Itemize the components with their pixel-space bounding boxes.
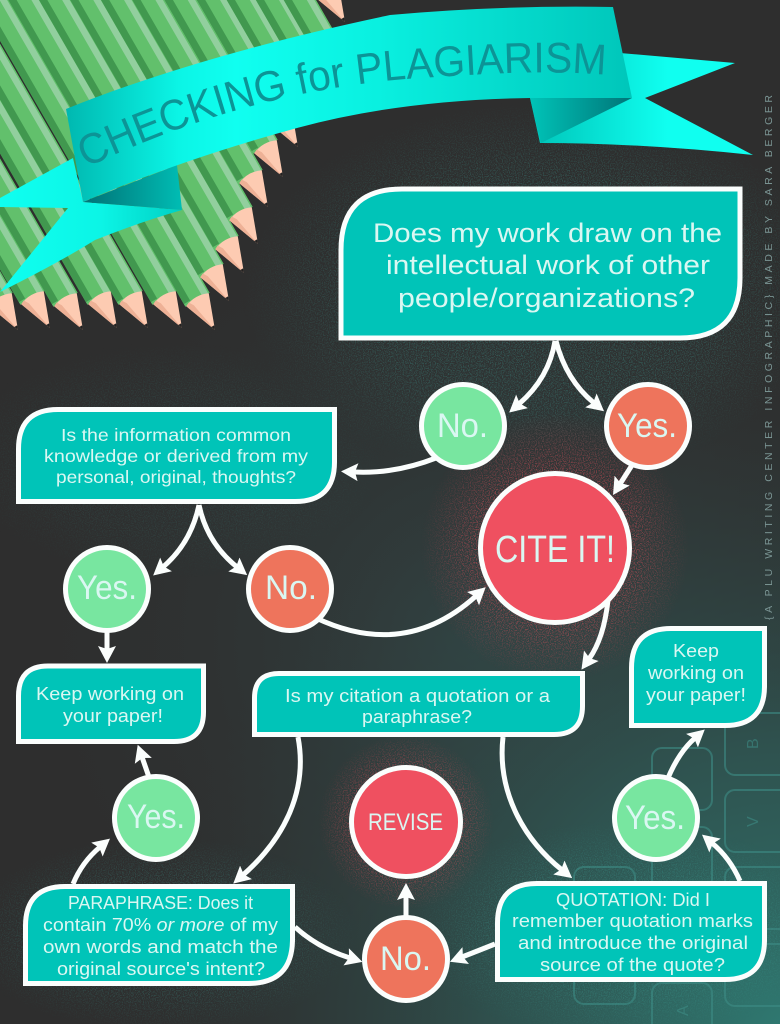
arrow: no to common knowledge box [354, 458, 436, 472]
arrow: right yes to keep working [668, 738, 695, 778]
arrow: box to left no [199, 505, 237, 567]
circle: top yes [606, 384, 690, 468]
circle: left no [248, 548, 332, 630]
arrow: quotation to right yes [712, 843, 740, 881]
right keep working box: working on [647, 663, 744, 683]
arrow: left yes to keep working [104, 628, 110, 650]
right keep working box: your paper! [646, 685, 746, 705]
arrow: box to left yes [163, 505, 199, 567]
arrow: question to yes [556, 341, 594, 403]
arrow: paraphrase to no [295, 927, 350, 958]
main question box: intellectual work of other [386, 250, 710, 280]
arrow: no to cite it [316, 596, 476, 635]
left keep working box [18, 666, 204, 742]
circle: top no [422, 384, 504, 468]
arrow: cite it to citation box [589, 600, 608, 659]
common knowledge box: knowledge or derived from my [44, 446, 308, 466]
keyboard keys decoration: V [745, 816, 762, 827]
arrow: paraphrase to yes [73, 847, 100, 884]
circle: left no: No. [265, 569, 317, 607]
common knowledge box [18, 410, 334, 502]
arrow: yes to cite it [620, 462, 634, 484]
paraphrase box [26, 886, 292, 984]
banner left fold [83, 165, 182, 210]
paraphrase box: original source's intent? [57, 959, 265, 979]
right keep working box: Keep [673, 641, 719, 661]
arrow: yes to left keep working [142, 757, 150, 780]
banner left tail [0, 158, 182, 292]
left keep working box: your paper! [63, 706, 163, 726]
circle: lower left yes [114, 776, 198, 860]
keyboard keys decoration [574, 713, 780, 1024]
title banner [0, 6, 753, 292]
paraphrase box: own words and match the [43, 937, 278, 957]
arrow: citation box to quotation [502, 737, 562, 870]
quotation box: QUOTATION: Did I [556, 890, 710, 910]
circle: lower left yes: Yes. [127, 798, 185, 836]
banner main band [66, 7, 632, 202]
circle: revise [352, 768, 460, 876]
circle: left yes [66, 548, 148, 630]
banner title text [86, 72, 612, 168]
circle: cite it [480, 474, 630, 622]
banner right fold [530, 98, 632, 143]
citation question box: Is my citation a quotation or a [285, 686, 551, 706]
right keep working box [632, 628, 764, 726]
quotation box: remember quotation marks [512, 911, 753, 931]
circle: cite it: CITE IT! [495, 529, 615, 571]
citation question box [254, 674, 582, 734]
quotation box: and introduce the original [518, 933, 748, 953]
keyboard keys decoration: B [745, 738, 762, 749]
arrow: citation box to paraphrase [243, 737, 300, 875]
left keep working box: Keep working on [36, 684, 184, 704]
title banner: CHECKING for PLAGIARISM [80, 42, 604, 164]
common knowledge box: Is the information common [61, 425, 291, 445]
pencils [0, 0, 357, 337]
circle: bottom no: No. [380, 940, 431, 978]
credit text: {A PLU WRITING CENTER INFOGRAPHIC} MADE BY SARA BERGER [763, 95, 775, 620]
arrow: quotation to no [462, 944, 495, 957]
banner right tail [530, 53, 753, 155]
citation question box: paraphrase? [362, 707, 472, 727]
paraphrase box: PARAPHRASE: Does it [68, 893, 253, 913]
main question box: Does my work draw on the [373, 218, 722, 248]
quotation box [498, 884, 764, 980]
quotation box: source of the quote? [540, 955, 725, 975]
main question box: people/organizations? [398, 283, 695, 313]
main question box [341, 189, 740, 338]
circle: top yes: Yes. [617, 407, 677, 445]
circle: top no: No. [437, 407, 488, 445]
paraphrase box: contain 70% or more of my [43, 915, 278, 935]
circle: right yes [614, 776, 698, 860]
arrow: no to revise [404, 896, 408, 918]
circle: right yes: Yes. [625, 799, 685, 837]
circle: revise: REVISE [368, 809, 443, 836]
keyboard keys decoration: A [675, 1005, 692, 1016]
circle: bottom no [364, 918, 448, 1000]
circle: left yes: Yes. [77, 569, 137, 607]
arrow: question to no [519, 341, 555, 404]
common knowledge box: personal, original, thoughts? [56, 467, 296, 487]
